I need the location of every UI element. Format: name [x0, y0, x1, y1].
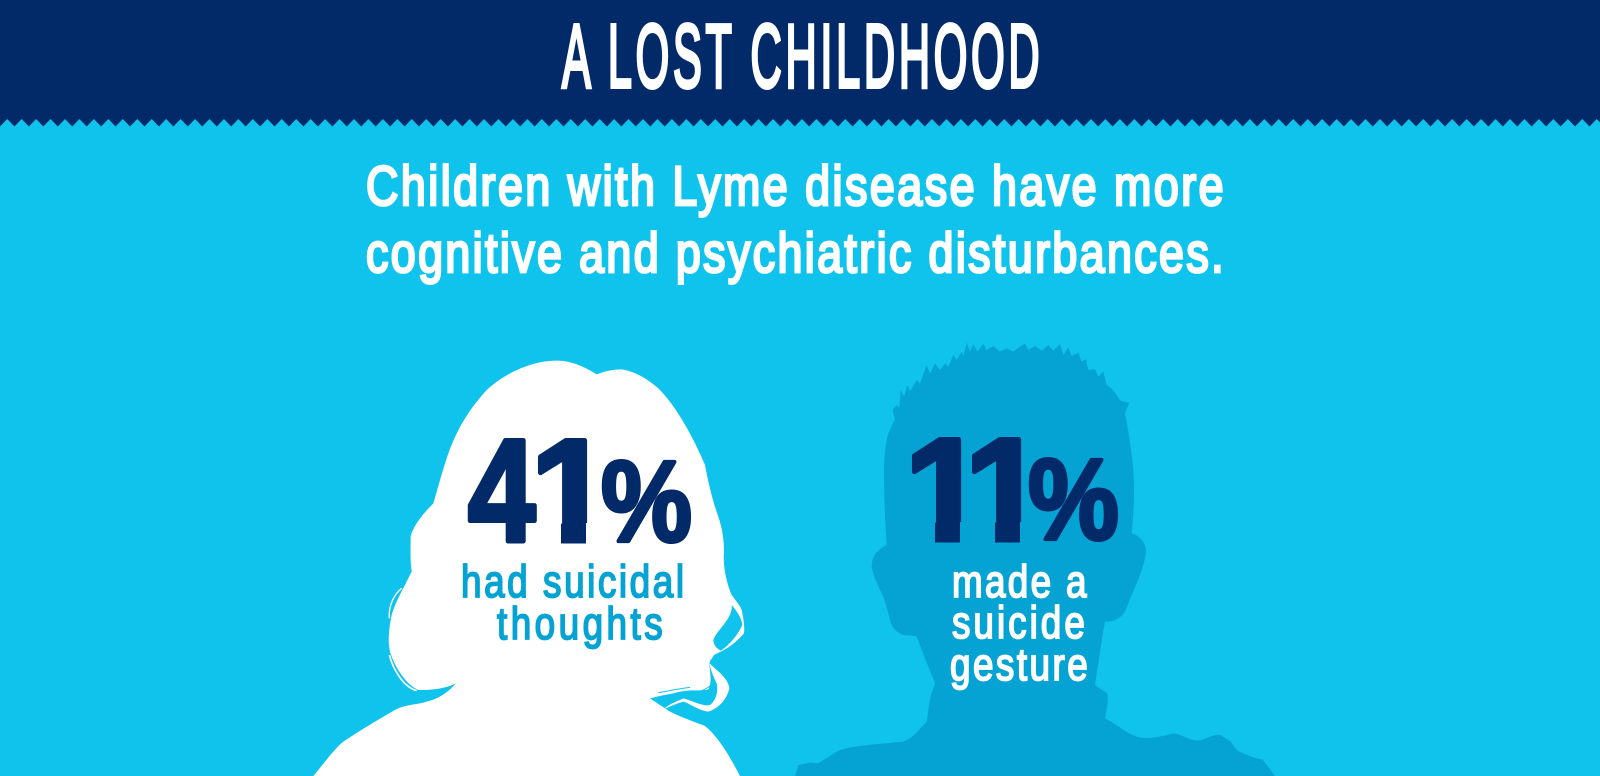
statistic: 41 percent — [468, 438, 692, 544]
caption: made a suicide gesture: suicide — [952, 598, 1085, 648]
caption: made a suicide gesture — [950, 557, 1088, 690]
statistic: 41 percent: 1 — [530, 409, 612, 572]
subtitle: Children with Lyme disease have more — [366, 154, 1224, 217]
icon: boy head silhouette — [795, 343, 1275, 776]
panel: boy silhouette — [795, 343, 1275, 776]
caption: had suicidal thoughts: thoughts — [497, 599, 663, 649]
icon: girl head silhouette — [313, 361, 744, 776]
statistic: 11 percent — [912, 437, 1118, 542]
statistic: 11 percent: 1 — [904, 408, 986, 571]
statistic: 41 percent: 4 — [468, 410, 535, 573]
subtitle: cognitive and psychiatric disturbances. — [366, 221, 1224, 284]
caption: made a suicide gesture: made a — [952, 557, 1087, 607]
title: A LOST CHILDHOOD — [562, 5, 1040, 106]
caption: had suicidal thoughts — [461, 557, 684, 649]
statistic: 11 percent: 1 — [964, 408, 1046, 571]
statistic: 11 percent: % — [1028, 436, 1119, 564]
header band — [0, 0, 1600, 127]
caption: had suicidal thoughts: had suicidal — [461, 557, 684, 607]
statistic: 41 percent: % — [601, 438, 692, 566]
panel: girl silhouette — [313, 361, 744, 776]
subtitle — [366, 154, 1224, 284]
caption: made a suicide gesture: gesture — [950, 640, 1088, 690]
